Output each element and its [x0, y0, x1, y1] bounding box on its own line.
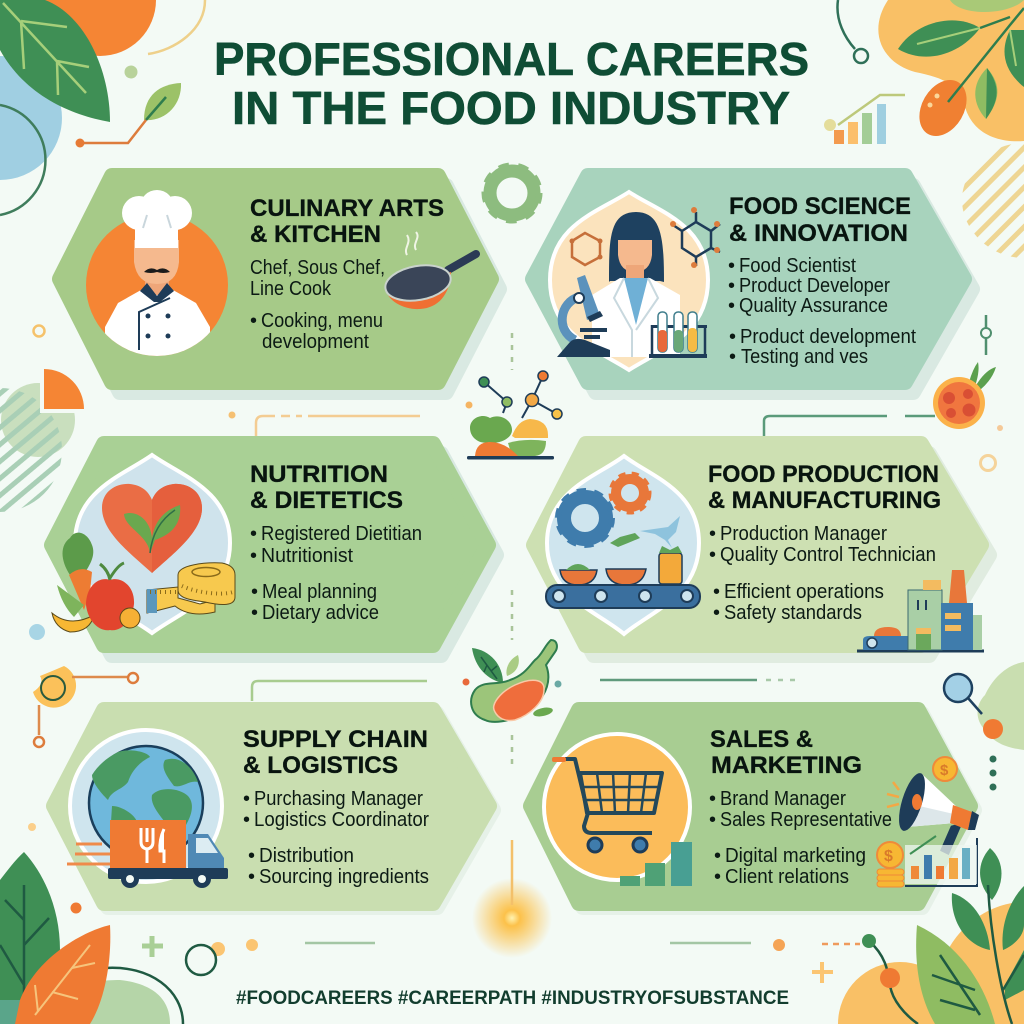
- title: IN THE FOOD INDUSTRY: [232, 82, 790, 134]
- text: supply chain: SUPPLY CHAIN: [243, 726, 428, 753]
- text: culinary arts: Cooking, menu: [261, 310, 383, 332]
- text: nutrition: •: [250, 523, 257, 545]
- text: food science: •: [729, 346, 736, 368]
- icon: molecule and vegetables: [466, 371, 562, 460]
- text: supply chain: Logistics Coordinator: [254, 809, 429, 831]
- icon: growth bars: [620, 842, 692, 886]
- icon: food scientist: [550, 192, 720, 370]
- icon: tomato: [933, 362, 996, 429]
- icon: megaphone: [887, 757, 979, 853]
- icon: factory: [857, 570, 984, 651]
- text: food science: & INNOVATION: [729, 220, 908, 247]
- icon: center gear: [485, 166, 539, 220]
- text: nutrition: •: [251, 602, 258, 624]
- text: food production: •: [709, 523, 716, 545]
- text: food science: Quality Assurance: [739, 295, 888, 317]
- text: nutrition: Dietary advice: [262, 602, 379, 624]
- text: nutrition: NUTRITION: [250, 461, 388, 488]
- decoration: side and connector ornaments: [0, 315, 1024, 958]
- text: sales: •: [709, 788, 716, 810]
- text: sales: Client relations: [725, 866, 849, 888]
- decoration: top-right corner: [837, 0, 1024, 258]
- text: supply chain: •: [248, 845, 255, 867]
- text: food science: FOOD SCIENCE: [729, 193, 911, 220]
- text: supply chain: •: [243, 809, 250, 831]
- text: culinary arts: & KITCHEN: [250, 221, 381, 248]
- text: food science: Product Developer: [739, 275, 890, 297]
- panel: food science: [533, 176, 972, 392]
- decoration: bottom-right corner: [773, 848, 1024, 1024]
- text: nutrition: Meal planning: [262, 581, 377, 603]
- decoration: bottom-left corner: [0, 852, 258, 1024]
- text: food science: [728, 193, 916, 368]
- text: sales: Brand Manager: [720, 788, 846, 810]
- text: food science: Product development: [740, 326, 916, 348]
- icon: coins and chart: [877, 836, 977, 887]
- text: nutrition: Registered Dietitian: [261, 523, 422, 545]
- text: food production: Safety standards: [724, 602, 862, 624]
- text: supply chain: •: [243, 788, 250, 810]
- text: food production: & MANUFACTURING: [708, 487, 941, 514]
- text: supply chain: Sourcing ingredients: [259, 866, 429, 888]
- decoration: top-left corner: [0, 0, 205, 215]
- text: sales: [709, 726, 892, 888]
- small bar chart icon: [824, 95, 905, 144]
- text: culinary arts: CULINARY ARTS: [250, 195, 444, 222]
- text: food production: •: [713, 602, 720, 624]
- text: nutrition: •: [250, 545, 257, 567]
- text: nutrition: •: [251, 581, 258, 603]
- icon: production line: [546, 456, 700, 634]
- text: culinary arts: [250, 195, 444, 353]
- text: culinary arts: •: [250, 310, 257, 332]
- text: food science: •: [729, 326, 736, 348]
- icon: frying pan: [383, 232, 476, 309]
- text: food science: •: [728, 295, 735, 317]
- panel: culinary arts: [60, 176, 499, 392]
- text: food production: [708, 461, 941, 624]
- footer hashtags: #FOODCAREERS #CAREERPATH #INDUSTRYOFSUBSTANCE: [236, 988, 789, 1009]
- text: supply chain: & LOGISTICS: [243, 752, 398, 779]
- icon: chef: [86, 190, 228, 360]
- text: sales: SALES &: [710, 726, 813, 753]
- text: nutrition: & DIETETICS: [250, 487, 403, 514]
- text: culinary arts: Chef, Sous Chef,: [250, 257, 385, 279]
- title: [214, 33, 809, 134]
- text: sales: Digital marketing: [725, 845, 866, 867]
- text: food science: •: [728, 275, 735, 297]
- text: supply chain: Distribution: [259, 845, 354, 867]
- icon: squash and salmon: [462, 640, 562, 722]
- text: food production: Production Manager: [720, 523, 887, 545]
- text: food science: Food Scientist: [739, 255, 856, 277]
- icon: delivery truck: [67, 820, 228, 888]
- icon: microscope: [557, 275, 610, 357]
- text: sales: •: [714, 866, 721, 888]
- title: PROFESSIONAL CAREERS: [214, 33, 809, 85]
- text: supply chain: •: [248, 866, 255, 888]
- panel: supply chain: [54, 710, 493, 907]
- icon: globe: [70, 730, 222, 882]
- text: culinary arts: Line Cook: [250, 278, 332, 300]
- panel: food production: [534, 444, 989, 655]
- icon: heart with leaf: [75, 455, 230, 633]
- text: nutrition: Nutritionist: [261, 545, 353, 567]
- text: nutrition: [250, 461, 422, 624]
- text: food science: •: [728, 255, 735, 277]
- text: food production: •: [709, 544, 716, 566]
- text: sales: •: [709, 809, 716, 831]
- icon: megaphone: $: [940, 762, 949, 779]
- text: supply chain: Purchasing Manager: [254, 788, 423, 810]
- text: food science: Testing and ves: [741, 346, 868, 368]
- panel: sales: [531, 710, 979, 907]
- text: culinary arts: development: [262, 331, 369, 353]
- panel: nutrition: [52, 444, 496, 655]
- text: supply chain: [243, 726, 429, 888]
- icon: vegetables and fruit: [52, 533, 140, 632]
- text: sales: MARKETING: [711, 752, 862, 779]
- icon: measuring tape: [147, 563, 235, 614]
- text: food production: Efficient operations: [724, 581, 884, 603]
- icon: coins and chart: $: [884, 848, 893, 865]
- icon: shopping cart: [544, 734, 690, 880]
- icon: test tubes: [649, 312, 707, 358]
- text: food production: •: [713, 581, 720, 603]
- text: sales: Sales Representative: [720, 809, 892, 831]
- text: food production: FOOD PRODUCTION: [708, 461, 939, 488]
- text: food production: Quality Control Technician: [720, 544, 936, 566]
- text: sales: •: [714, 845, 721, 867]
